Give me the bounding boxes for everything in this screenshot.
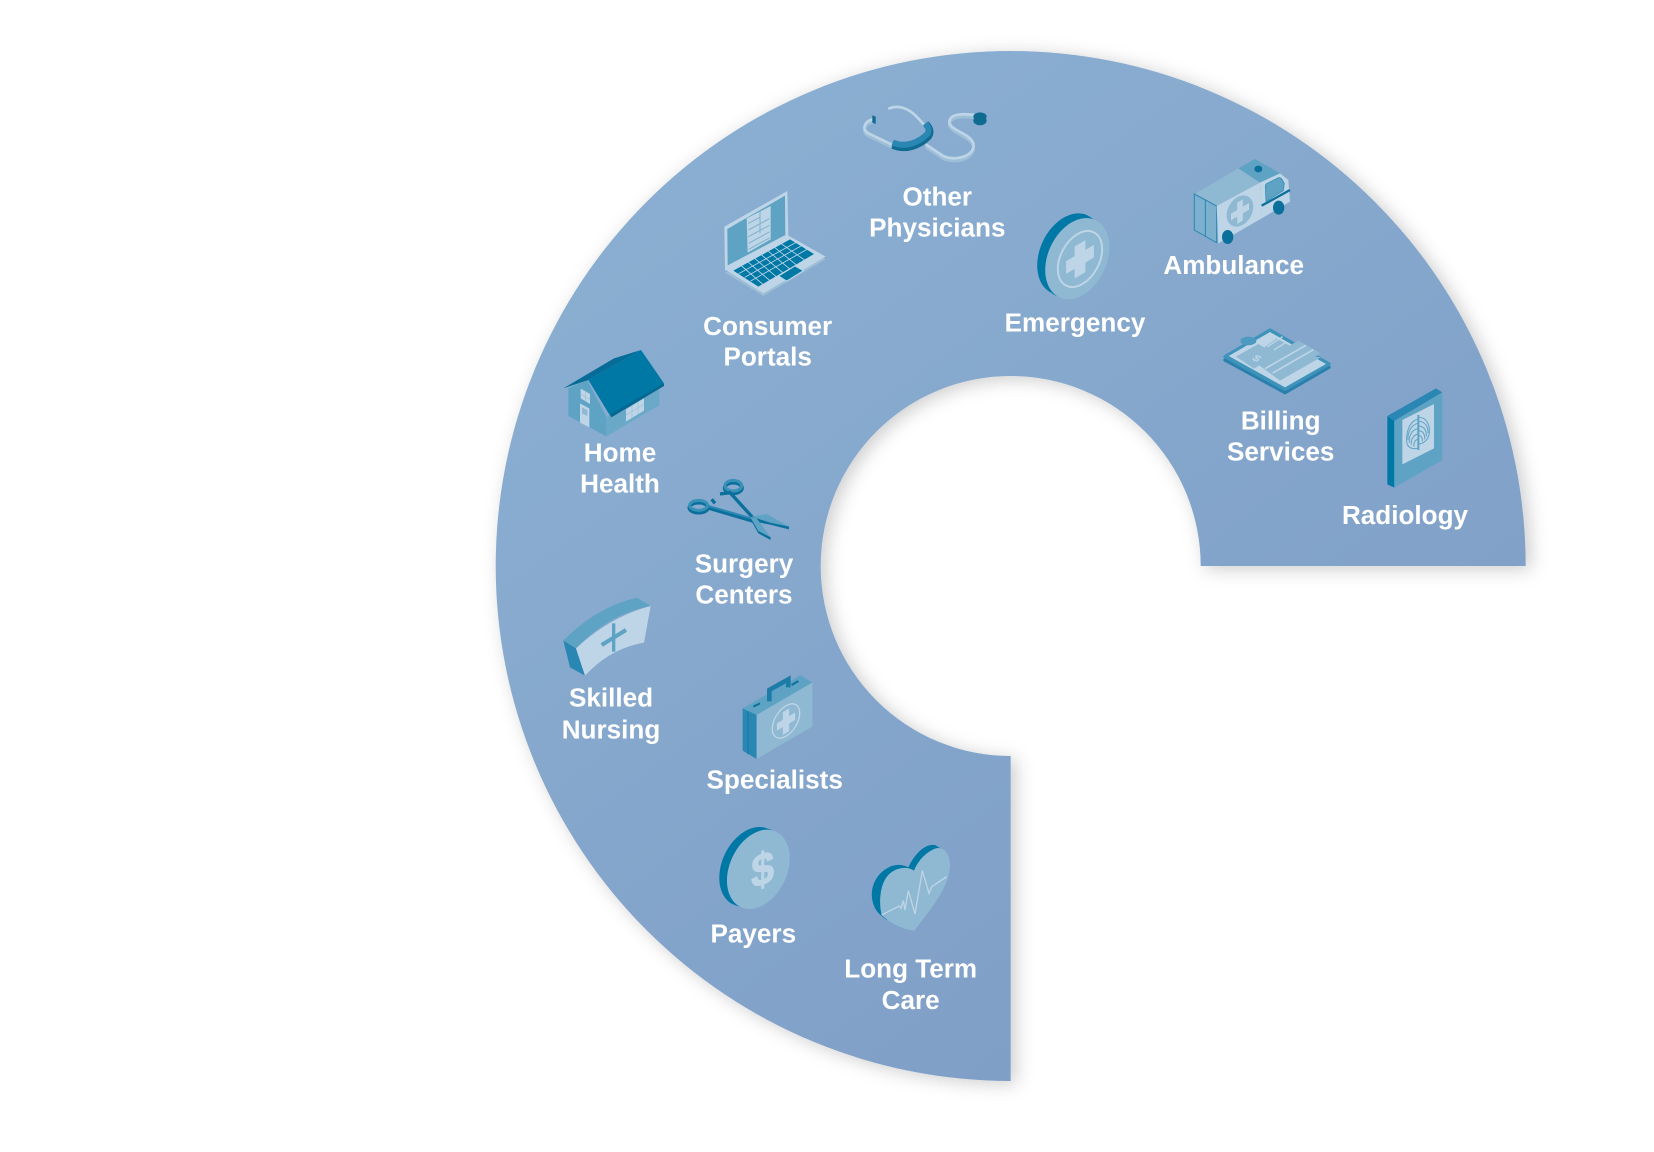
icon: payers coin [707, 817, 802, 919]
icon: billing clipboard: $ [1249, 354, 1264, 364]
label: Skilled Nursing: Nursing [562, 714, 660, 744]
icon: emergency coin [1025, 203, 1122, 310]
label: Billing Services [1227, 405, 1334, 467]
label: Emergency: Emergency [1005, 308, 1146, 338]
icon: medical briefcase [743, 675, 812, 759]
icon: laptop [724, 191, 826, 296]
label: Other Physicians: Physicians [869, 213, 1005, 243]
label: Home Health [580, 438, 660, 499]
label: Long Term Care: Care [882, 985, 940, 1015]
label: Home Health: Home [584, 438, 656, 468]
label: Other Physicians [869, 181, 1005, 243]
panel: three-quarter ring band [496, 51, 1526, 1081]
label: Billing Services: Billing [1241, 405, 1321, 435]
label: Consumer Portals: Portals [723, 342, 812, 372]
icon: heart with ECG [872, 845, 950, 931]
label: Specialists: Specialists [707, 764, 843, 794]
label: Skilled Nursing [562, 683, 660, 744]
label: Surgery Centers: Surgery [695, 548, 794, 578]
icon: radiology x-ray [1387, 388, 1442, 488]
label: Ambulance: Ambulance [1163, 250, 1304, 280]
icon: surgical scissors [689, 480, 789, 540]
label: Payers: Payers [710, 918, 796, 948]
icon: payers coin: $ [751, 839, 774, 899]
label: Radiology: Radiology [1342, 500, 1469, 530]
icon: home [563, 350, 664, 437]
label: Billing Services: Services [1227, 437, 1334, 467]
label: Consumer Portals [703, 311, 832, 372]
label: Surgery Centers: Centers [695, 579, 793, 609]
icon: stethoscope [864, 107, 987, 161]
label: Long Term Care: Long Term [844, 954, 977, 984]
label: Surgery Centers [695, 548, 794, 609]
label: Other Physicians: Other [903, 181, 972, 211]
label: Long Term Care [844, 954, 977, 1015]
icon: ambulance [1194, 159, 1290, 244]
icon: billing clipboard [1225, 330, 1329, 393]
label: Consumer Portals: Consumer [703, 311, 832, 341]
label: Skilled Nursing: Skilled [569, 683, 653, 713]
label: Home Health: Health [580, 469, 660, 499]
icon: nurse cap [563, 598, 651, 676]
